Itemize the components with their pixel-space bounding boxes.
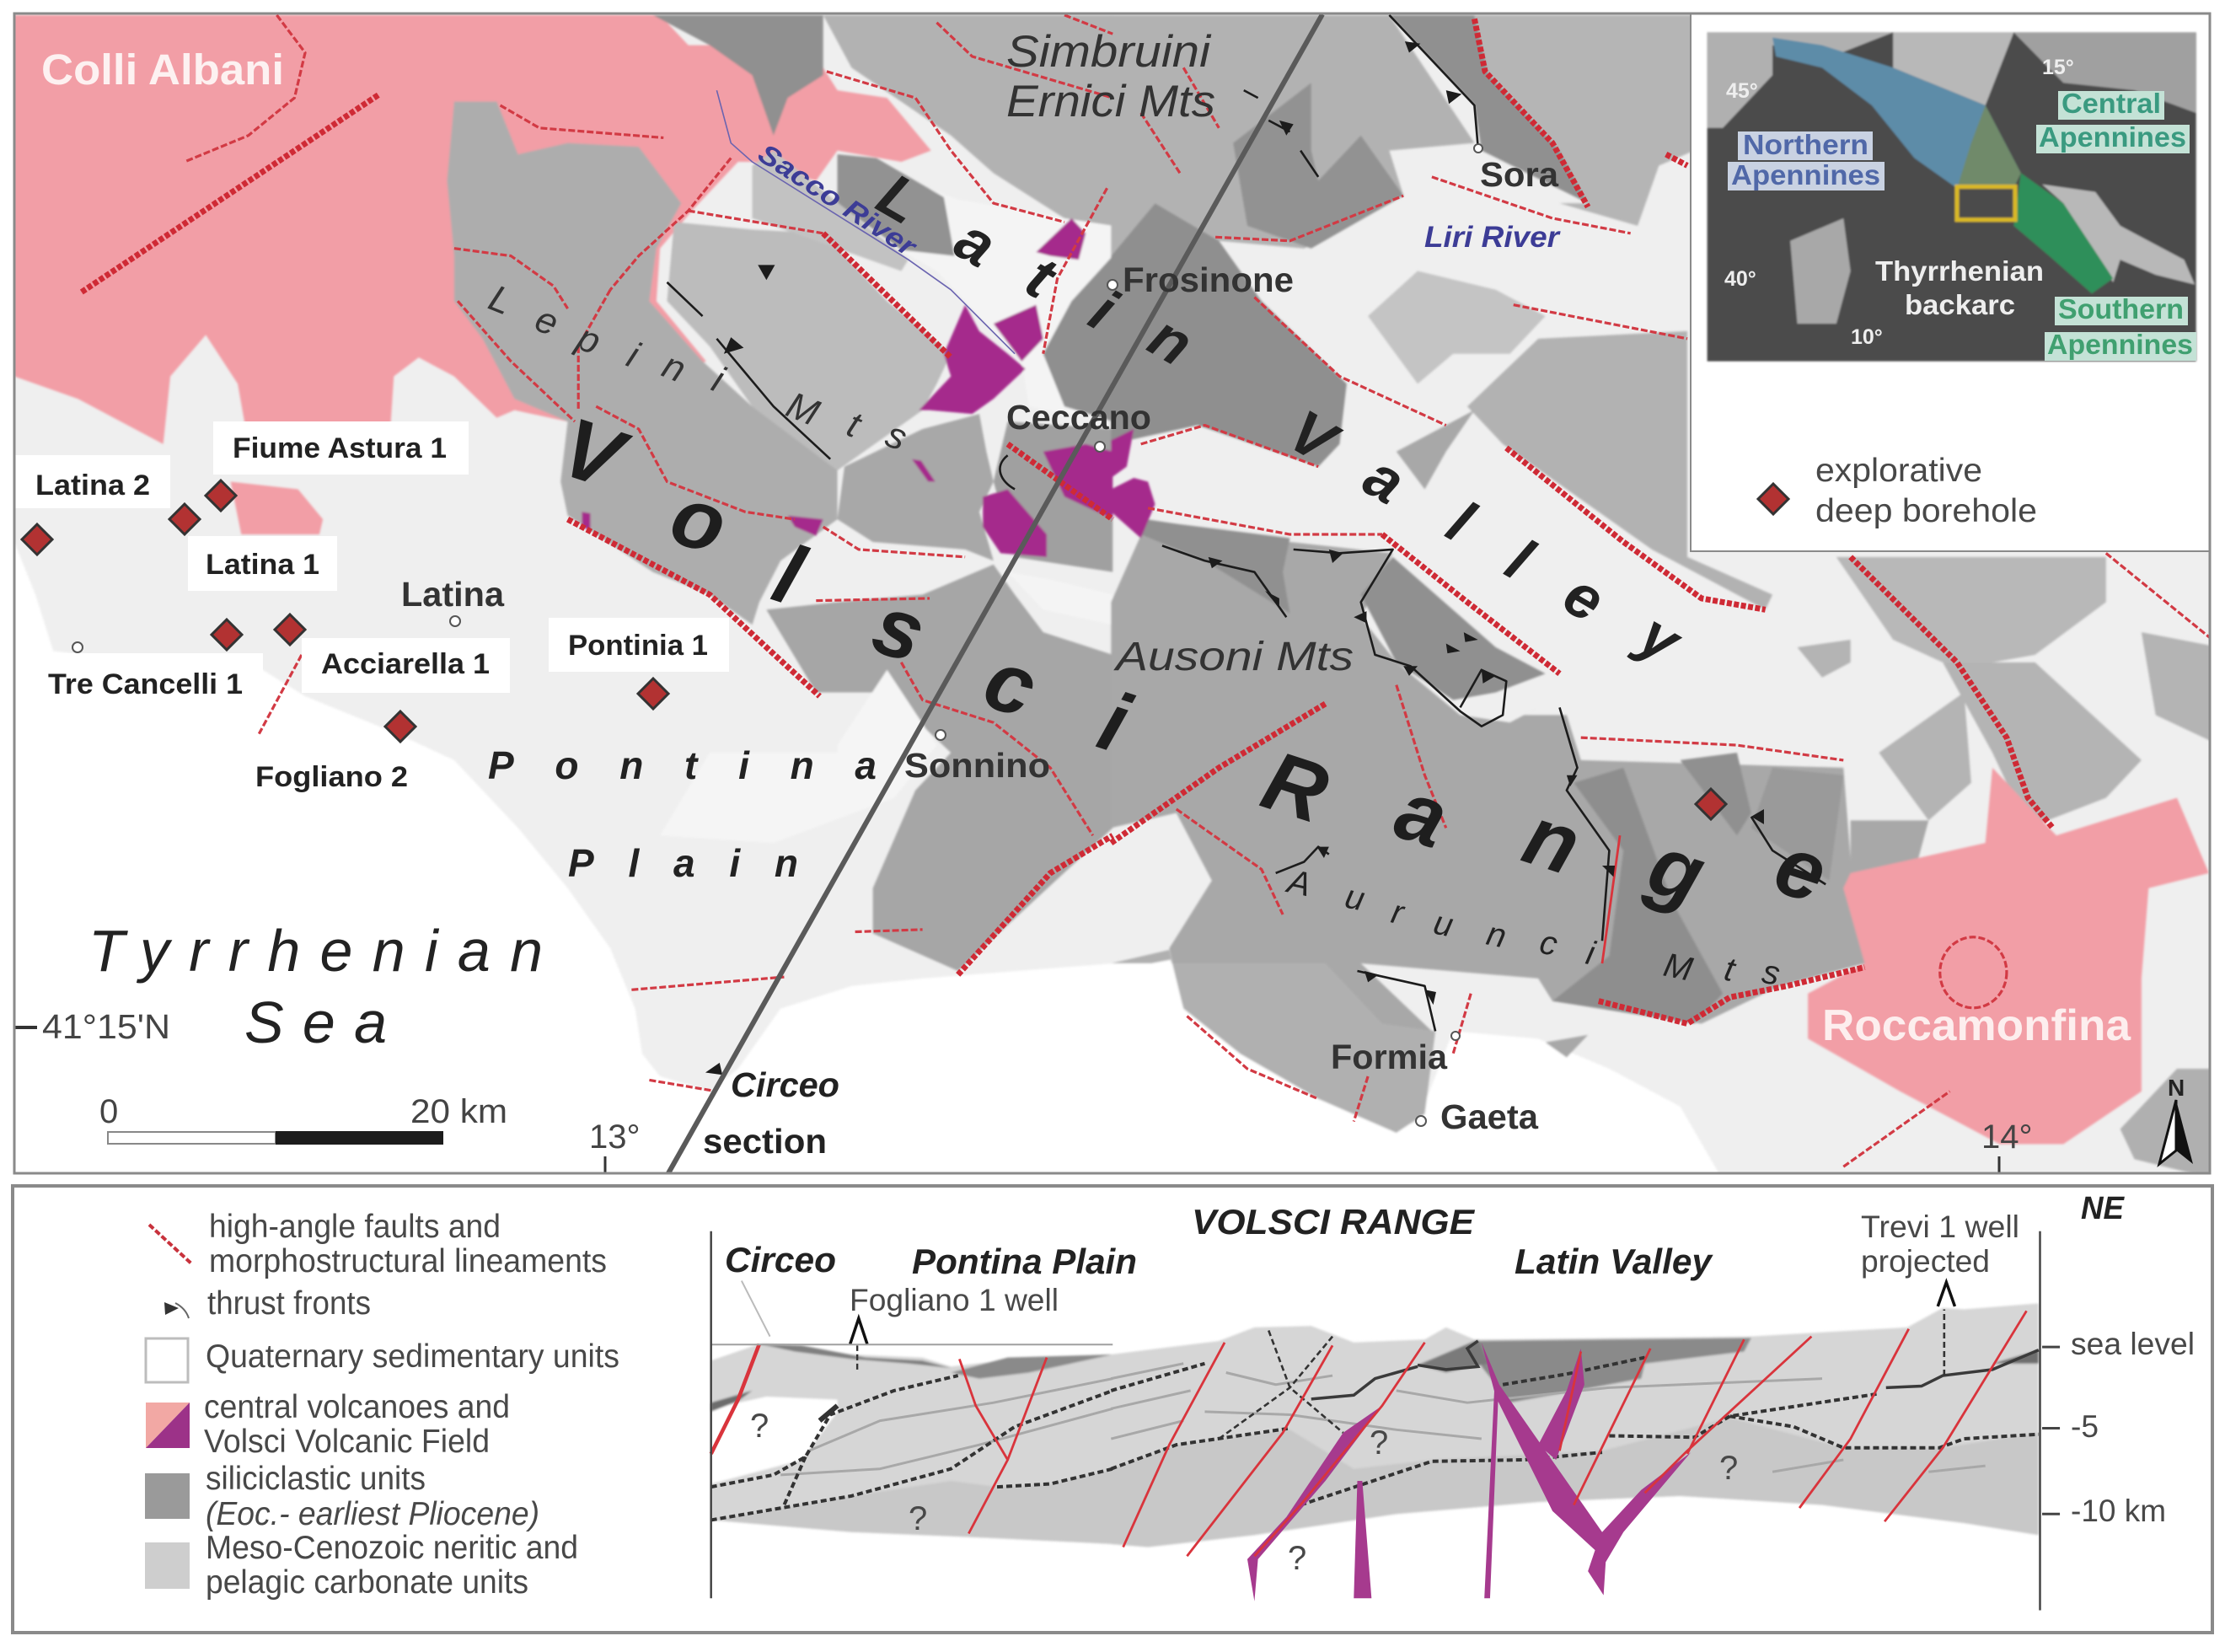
borehole label: Fiume Astura 1 xyxy=(213,421,469,475)
legend item: carbonate units: pelagic carbonate units xyxy=(206,1564,528,1601)
label: Frosinone: Frosinone xyxy=(1123,260,1294,299)
volcanic feeder dikes xyxy=(1247,1343,1691,1601)
section labels: Circeo xyxy=(725,1240,836,1279)
label: Pontina: Pontina xyxy=(488,743,877,787)
inset map of Italy: Apennines xyxy=(2047,329,2193,360)
borehole label: Latina 2: Latina 2 xyxy=(35,469,150,502)
cross-section drawing xyxy=(711,1191,2195,1611)
inset map of Italy: Central xyxy=(2061,88,2161,119)
inset map of Italy: Apennines xyxy=(1731,159,1880,190)
longitude 13 degrees: 13° xyxy=(589,1118,641,1156)
section labels: Fogliano 1 well xyxy=(850,1283,1059,1317)
section labels: ? xyxy=(1288,1540,1306,1577)
legend item: siliciclastic units xyxy=(145,1461,539,1532)
legend: explorative deep borehole: deep borehole xyxy=(1815,493,2037,529)
legend item: carbonate units: Meso-Cenozoic neritic and xyxy=(206,1530,578,1566)
Fogliano 1 well arrow xyxy=(850,1318,867,1370)
legend item: high-angle faults: high-angle faults and xyxy=(209,1209,501,1245)
inset map of Italy: Southern xyxy=(2058,293,2184,324)
panel: location inset and borehole key xyxy=(1691,13,2210,551)
label: Liri River: Liri River xyxy=(1424,221,1561,254)
inset map of Italy: backarc xyxy=(1905,289,2015,320)
label: Sora: Sora xyxy=(1480,155,1559,194)
label: Sea: Sea xyxy=(244,990,387,1055)
legend item: siliciclastic units: siliciclastic units xyxy=(206,1461,426,1497)
section trace line xyxy=(668,14,1322,1173)
label: Formia: Formia xyxy=(1331,1038,1448,1076)
label: Lepini Mts: Lepini Mts xyxy=(483,277,913,459)
label: Latin Valley: Latin Valley xyxy=(866,161,1694,678)
section labels: ? xyxy=(750,1408,769,1445)
label: Roccamonfina: Roccamonfina xyxy=(1822,1001,2131,1050)
scale bar: 0 xyxy=(99,1093,118,1130)
section labels: projected xyxy=(1861,1244,1990,1279)
legend xyxy=(145,1209,619,1601)
label: Simbruini Ernici Mts: Ernici Mts xyxy=(1006,77,1215,126)
label: Ceccano: Ceccano xyxy=(1006,398,1151,437)
longitude 14 degrees xyxy=(1981,1118,2033,1173)
borehole label: Tre Cancelli 1 xyxy=(32,653,263,711)
legend item: high-angle faults: morphostructural lineaments xyxy=(209,1243,607,1279)
label: Gaeta: Gaeta xyxy=(1440,1097,1539,1136)
section labels: Trevi 1 well xyxy=(1861,1210,2019,1244)
inset map of Italy: 40° xyxy=(1724,267,1756,291)
label: Plain: Plain xyxy=(568,841,798,885)
inset map of Italy: Apennines xyxy=(2039,121,2186,153)
icon: north arrow: N xyxy=(2168,1075,2185,1101)
borehole label: Latina 1 xyxy=(188,536,337,591)
borehole markers xyxy=(22,480,1726,819)
town markers xyxy=(72,144,1482,1126)
label: Circeo: Circeo xyxy=(731,1065,839,1104)
fault lines: west half xyxy=(82,15,1112,1092)
label: Tyrrhenian: Tyrrhenian xyxy=(88,918,543,984)
label: Latina: Latina xyxy=(401,575,505,614)
label: Colli Albani: Colli Albani xyxy=(41,46,284,94)
legend item: volcanics: central volcanoes and xyxy=(204,1389,510,1425)
section labels: Latin Valley xyxy=(1515,1242,1714,1281)
section labels: sea level xyxy=(2071,1327,2195,1361)
legend item: carbonate units xyxy=(145,1530,578,1601)
legend item: thrust fronts: thrust fronts xyxy=(207,1285,371,1322)
Trevi 1 well arrow xyxy=(1938,1282,1954,1376)
borehole label: Pontinia 1: Pontinia 1 xyxy=(568,630,708,662)
borehole label: Tre Cancelli 1: Tre Cancelli 1 xyxy=(48,668,243,700)
section labels: -10 km xyxy=(2071,1494,2166,1528)
fault lines: east half xyxy=(1111,15,2212,1167)
latitude label: 41°15'N xyxy=(42,1007,170,1046)
legend item: Quaternary units: Quaternary sedimentary units xyxy=(206,1338,619,1375)
inset map of Italy xyxy=(1708,32,2196,362)
panel: geological map xyxy=(14,13,2220,1182)
section labels xyxy=(725,1191,2195,1577)
section labels: ? xyxy=(1370,1424,1388,1462)
label: Ausoni Mts: Ausoni Mts xyxy=(1112,635,1354,679)
borehole label: Acciarella 1 xyxy=(302,638,510,693)
legend: explorative deep borehole xyxy=(1758,453,2037,529)
label: Sonnino: Sonnino xyxy=(904,746,1050,785)
longitude 13 degrees xyxy=(589,1118,641,1173)
borehole label: Pontinia 1 xyxy=(549,618,729,672)
section labels: -5 xyxy=(2071,1409,2099,1444)
borehole label: Fiume Astura 1: Fiume Astura 1 xyxy=(233,432,447,464)
scale bar: 20 km xyxy=(410,1093,507,1130)
inset map of Italy: Thyrrhenian xyxy=(1875,255,2044,287)
inset map of Italy: Northern xyxy=(1743,129,1868,160)
thrust fronts: west half xyxy=(667,90,1015,1075)
map frame xyxy=(14,13,2210,1173)
label: Simbruini Ernici Mts: Simbruini xyxy=(1006,27,1211,77)
borehole label: Fogliano 2: Fogliano 2 xyxy=(255,761,408,793)
section lines: west half xyxy=(711,1231,1112,1598)
section labels: ? xyxy=(1719,1450,1738,1487)
section labels: VOLSCI RANGE xyxy=(1192,1202,1476,1242)
longitude 14 degrees: 14° xyxy=(1981,1118,2033,1156)
legend: explorative deep borehole: explorative xyxy=(1815,453,1982,489)
thrust fronts: east half xyxy=(1162,15,1826,1031)
legend item: siliciclastic units: (Eoc.- earliest Pliocene) xyxy=(206,1496,539,1532)
legend item: volcanics: Volsci Volcanic Field xyxy=(204,1424,490,1460)
label: Aurunci Mts: Aurunci Mts xyxy=(1283,862,1783,993)
panel: legend and cross-section xyxy=(13,1186,2212,1633)
borehole label: Latina 2 xyxy=(14,455,170,508)
icon: north arrow xyxy=(2159,1075,2193,1164)
borehole label: Acciarella 1: Acciarella 1 xyxy=(321,648,490,680)
legend item: high-angle faults xyxy=(149,1209,607,1279)
section labels: Pontina Plain xyxy=(912,1242,1137,1281)
inset map of Italy: 10° xyxy=(1851,325,1883,349)
label: Volsci Range: Volsci Range xyxy=(550,400,1838,923)
legend item: volcanics xyxy=(146,1389,510,1460)
inset map of Italy: 45° xyxy=(1726,79,1758,103)
label: section: section xyxy=(703,1122,827,1161)
section body xyxy=(711,1303,2039,1547)
label: Sacco River: Sacco River xyxy=(753,137,924,263)
map units xyxy=(14,15,2220,1182)
section lines: east half xyxy=(1111,1231,2060,1611)
inset map of Italy: 15° xyxy=(2042,56,2074,79)
section labels: ? xyxy=(909,1500,927,1537)
section labels: NE xyxy=(2081,1191,2126,1226)
borehole label: Latina 1: Latina 1 xyxy=(206,549,319,581)
scale bar xyxy=(99,1093,507,1145)
